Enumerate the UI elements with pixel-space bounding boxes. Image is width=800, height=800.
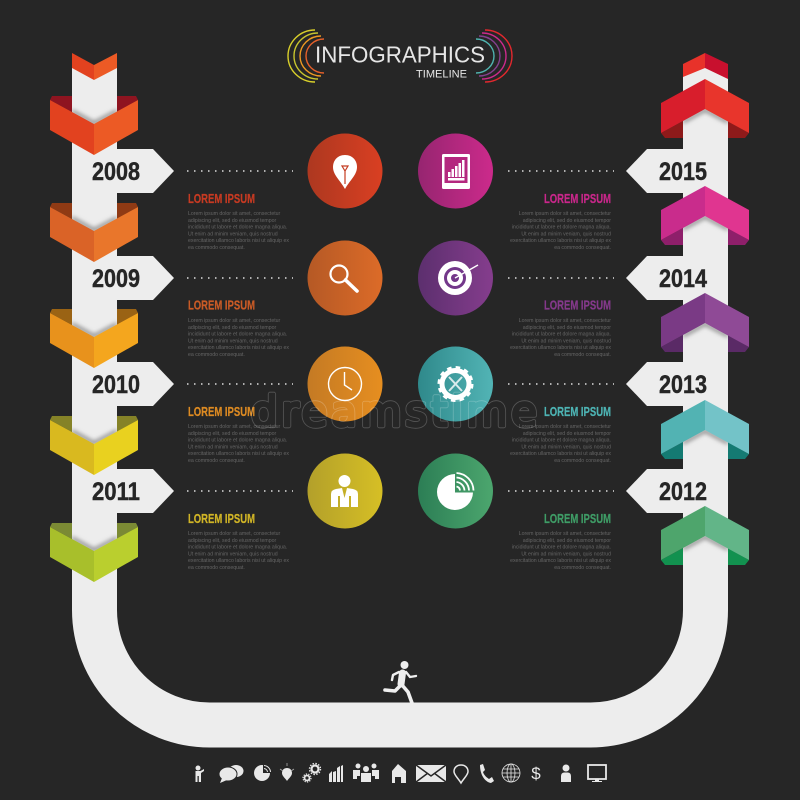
text block 2012: Lorem ipsum dolor sit amet, consectetur: [519, 531, 611, 537]
text block 2011: LOREM IPSUM: [188, 511, 255, 526]
year labels: 2009: [92, 265, 140, 293]
text block 2011: incididunt ut labore et dolore magna aliqua.: [188, 544, 287, 550]
timeline track: [72, 66, 706, 725]
text block 2011: ea commodo consequat.: [188, 565, 245, 571]
circle icon: tablet chart: [418, 134, 493, 208]
right chevron bottom: [661, 506, 749, 565]
text block 2009: LOREM IPSUM: [188, 298, 255, 312]
text block 2012: LOREM IPSUM: [544, 511, 611, 526]
left chevron 2009: [50, 203, 138, 262]
icon: monitor: [588, 765, 606, 782]
text block 2010: exercitation ullamco laboris nisi ut aliquip ex: [188, 451, 289, 457]
right chevron 2012: [661, 400, 749, 459]
text block 2008: exercitation ullamco laboris nisi ut aliquip ex: [188, 238, 289, 244]
circle icon: gear: [418, 346, 493, 422]
icon: gears: [303, 764, 320, 782]
dotted connectors: [187, 171, 614, 491]
text block 2008: [188, 191, 289, 251]
circle icon: target: [418, 240, 493, 316]
icon: person standing: [196, 766, 204, 782]
text block 2010: Ut enim ad minim veniam, quis nostrud: [188, 444, 278, 450]
circle icon: businessman: [308, 454, 382, 528]
text block 2010: [188, 404, 289, 464]
text block 2011: Ut enim ad minim veniam, quis nostrud: [188, 552, 278, 558]
right top arrow tip: [683, 53, 728, 79]
left year tags: [117, 149, 174, 513]
right chevron 2015: [661, 79, 749, 138]
text block 2014: exercitation ullamco laboris nisi ut aliquip ex: [510, 345, 611, 351]
icon: user: [561, 764, 571, 782]
text block 2013: adipiscing elit, sed do eiusmod tempor: [523, 431, 611, 437]
left chevron 2010: [50, 309, 138, 368]
text block 2015: exercitation ullamco laboris nisi ut aliquip ex: [510, 238, 611, 244]
right year tags: [626, 149, 683, 513]
logo: infographics timeline: [288, 30, 512, 82]
text block 2011: exercitation ullamco laboris nisi ut aliquip ex: [188, 558, 289, 564]
icon: envelope: [416, 765, 446, 782]
text block 2010: ea commodo consequat.: [188, 458, 245, 464]
text block 2013: [510, 404, 611, 464]
circle icon: magnifier: [308, 240, 382, 316]
text block 2012: [510, 511, 611, 571]
logo: infographics timeline: TIMELINE: [416, 68, 467, 80]
text block 2014: Ut enim ad minim veniam, quis nostrud: [521, 338, 611, 344]
circle icon: light bulb: [308, 134, 382, 208]
right chevron 2014: [661, 186, 749, 245]
year labels: 2015: [659, 158, 707, 186]
text block 2009: ea commodo consequat.: [188, 352, 245, 358]
left chevron bottom: [50, 523, 138, 582]
text block 2013: Lorem ipsum dolor sit amet, consectetur: [519, 424, 611, 430]
logo: infographics timeline: INFOGRAPHICS: [315, 42, 485, 68]
text block 2015: Lorem ipsum dolor sit amet, consectetur: [519, 211, 611, 217]
year labels: 2011: [92, 478, 140, 506]
text block 2013: incididunt ut labore et dolore magna aliqua.: [512, 438, 611, 444]
text block 2010: incididunt ut labore et dolore magna aliqua.: [188, 438, 287, 444]
icon: house: [392, 764, 406, 783]
text block 2014: Lorem ipsum dolor sit amet, consectetur: [519, 318, 611, 324]
year labels: 2014: [659, 265, 707, 293]
text block 2012: incididunt ut labore et dolore magna aliqua.: [512, 544, 611, 550]
circle icon: pie chart: [418, 454, 493, 528]
year labels: 2013: [659, 371, 707, 399]
text block 2009: Ut enim ad minim veniam, quis nostrud: [188, 338, 278, 344]
icon: speech bubbles: [219, 765, 244, 783]
text block 2015: ea commodo consequat.: [554, 245, 611, 251]
text block 2009: adipiscing elit, sed do eiusmod tempor: [188, 325, 277, 331]
icon: dollar sign: $: [531, 764, 541, 783]
right chevron 2013: [661, 293, 749, 352]
left chevron 2008: [50, 96, 138, 155]
icon: globe: [502, 764, 520, 782]
year labels: 2008: [92, 158, 140, 186]
text block 2012: ea commodo consequat.: [554, 565, 611, 571]
text block 2015: [510, 191, 611, 251]
text block 2014: [510, 298, 611, 358]
text block 2008: Lorem ipsum dolor sit amet, consectetur: [188, 211, 281, 217]
text block 2008: Ut enim ad minim veniam, quis nostrud: [188, 232, 278, 238]
icon: pie signal: [254, 765, 271, 781]
text block 2015: incididunt ut labore et dolore magna aliqua.: [512, 224, 611, 230]
text block 2014: incididunt ut labore et dolore magna aliqua.: [512, 332, 611, 338]
text block 2015: LOREM IPSUM: [544, 191, 611, 206]
text block 2009: Lorem ipsum dolor sit amet, consectetur: [188, 318, 281, 324]
text block 2015: Ut enim ad minim veniam, quis nostrud: [521, 232, 611, 238]
left chevron 2011: [50, 416, 138, 475]
year labels: [92, 158, 707, 506]
watermark: [251, 392, 537, 429]
text block 2011: adipiscing elit, sed do eiusmod tempor: [188, 538, 277, 544]
text block 2012: adipiscing elit, sed do eiusmod tempor: [523, 538, 611, 544]
icon: light bulb: [280, 763, 294, 781]
text block 2010: LOREM IPSUM: [188, 404, 255, 419]
text block 2008: LOREM IPSUM: [188, 191, 255, 206]
icon: people group: [353, 764, 379, 782]
text block 2014: adipiscing elit, sed do eiusmod tempor: [523, 325, 611, 331]
text block 2010: Lorem ipsum dolor sit amet, consectetur: [188, 424, 281, 430]
icon: telephone: [480, 764, 494, 783]
text block 2011: [188, 511, 289, 571]
year labels: 2012: [659, 478, 707, 506]
text block 2008: incididunt ut labore et dolore magna aliqua.: [188, 224, 287, 230]
text block 2010: adipiscing elit, sed do eiusmod tempor: [188, 431, 277, 437]
text block 2008: ea commodo consequat.: [188, 245, 245, 251]
text block 2015: adipiscing elit, sed do eiusmod tempor: [523, 218, 611, 224]
text block 2013: Ut enim ad minim veniam, quis nostrud: [521, 444, 611, 450]
text block 2009: incididunt ut labore et dolore magna aliqua.: [188, 332, 287, 338]
left top arrow tip: [72, 53, 117, 80]
text block 2012: exercitation ullamco laboris nisi ut aliquip ex: [510, 558, 611, 564]
text block 2014: LOREM IPSUM: [544, 298, 611, 312]
text block 2014: ea commodo consequat.: [554, 352, 611, 358]
circle icon: clock: [308, 346, 382, 422]
text block 2013: ea commodo consequat.: [554, 458, 611, 464]
year labels: 2010: [92, 371, 140, 399]
text block 2009: exercitation ullamco laboris nisi ut aliquip ex: [188, 345, 289, 351]
icon: map pin: [454, 765, 468, 783]
text block 2009: [188, 298, 289, 358]
text block 2013: exercitation ullamco laboris nisi ut aliquip ex: [510, 451, 611, 457]
text block 2012: Ut enim ad minim veniam, quis nostrud: [521, 552, 611, 558]
runner icon: [385, 661, 416, 703]
bottom icon row: [196, 763, 606, 783]
icon: bar chart: [329, 765, 343, 782]
text block 2011: Lorem ipsum dolor sit amet, consectetur: [188, 531, 281, 537]
text block 2008: adipiscing elit, sed do eiusmod tempor: [188, 218, 277, 224]
text block 2013: LOREM IPSUM: [544, 404, 611, 419]
